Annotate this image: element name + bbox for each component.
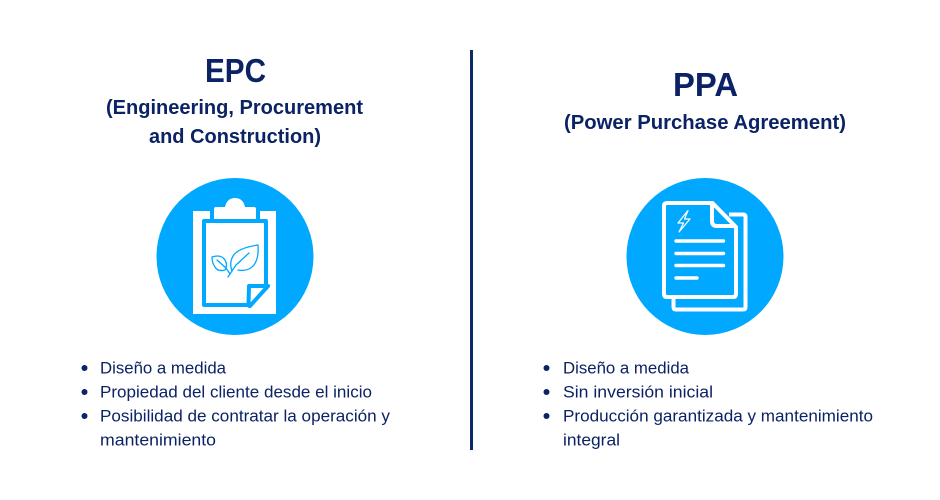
vertical divider bbox=[470, 50, 473, 450]
bullet: Producción garantizada: Producción garantizada y mantenimiento bbox=[563, 408, 873, 426]
bullet: Propiedad del cliente: Propiedad del cliente desde el inicio bbox=[100, 384, 372, 402]
panel: EPC bbox=[82, 52, 391, 450]
bullet: Posibilidad de contratar: mantenimiento bbox=[100, 432, 216, 450]
bullet: Producción garantizada bbox=[544, 408, 873, 450]
bullet: Diseño a medida: Diseño a medida bbox=[563, 360, 690, 378]
bullet: Sin inversión inicial: Sin inversión inicial bbox=[563, 384, 713, 402]
icon: clipboard with leaves bbox=[156, 178, 314, 335]
bullet: Diseño a medida: Diseño a medida bbox=[100, 360, 227, 378]
subheading: Engineering, Procurement and Construction: (Engineering, Procurement bbox=[106, 96, 363, 119]
subheading: Engineering, Procurement and Construction bbox=[106, 96, 363, 148]
bullet list: PPA bbox=[544, 360, 873, 450]
panel: PPA bbox=[544, 66, 873, 450]
bullet: Posibilidad de contratar: Posibilidad de contratar la operación y bbox=[100, 408, 391, 426]
bullet: Posibilidad de contratar bbox=[82, 408, 391, 450]
bullet: Producción garantizada: integral bbox=[563, 432, 620, 450]
icon: documents with lightning bolt bbox=[626, 178, 784, 335]
heading: PPA: PPA bbox=[673, 66, 738, 103]
subheading: Power Purchase Agreement: (Power Purchase Agreement) bbox=[564, 111, 846, 134]
subheading: Engineering, Procurement and Construction: and Construction) bbox=[149, 125, 321, 148]
bullet list: EPC bbox=[82, 360, 391, 450]
heading: EPC: EPC bbox=[205, 52, 266, 89]
